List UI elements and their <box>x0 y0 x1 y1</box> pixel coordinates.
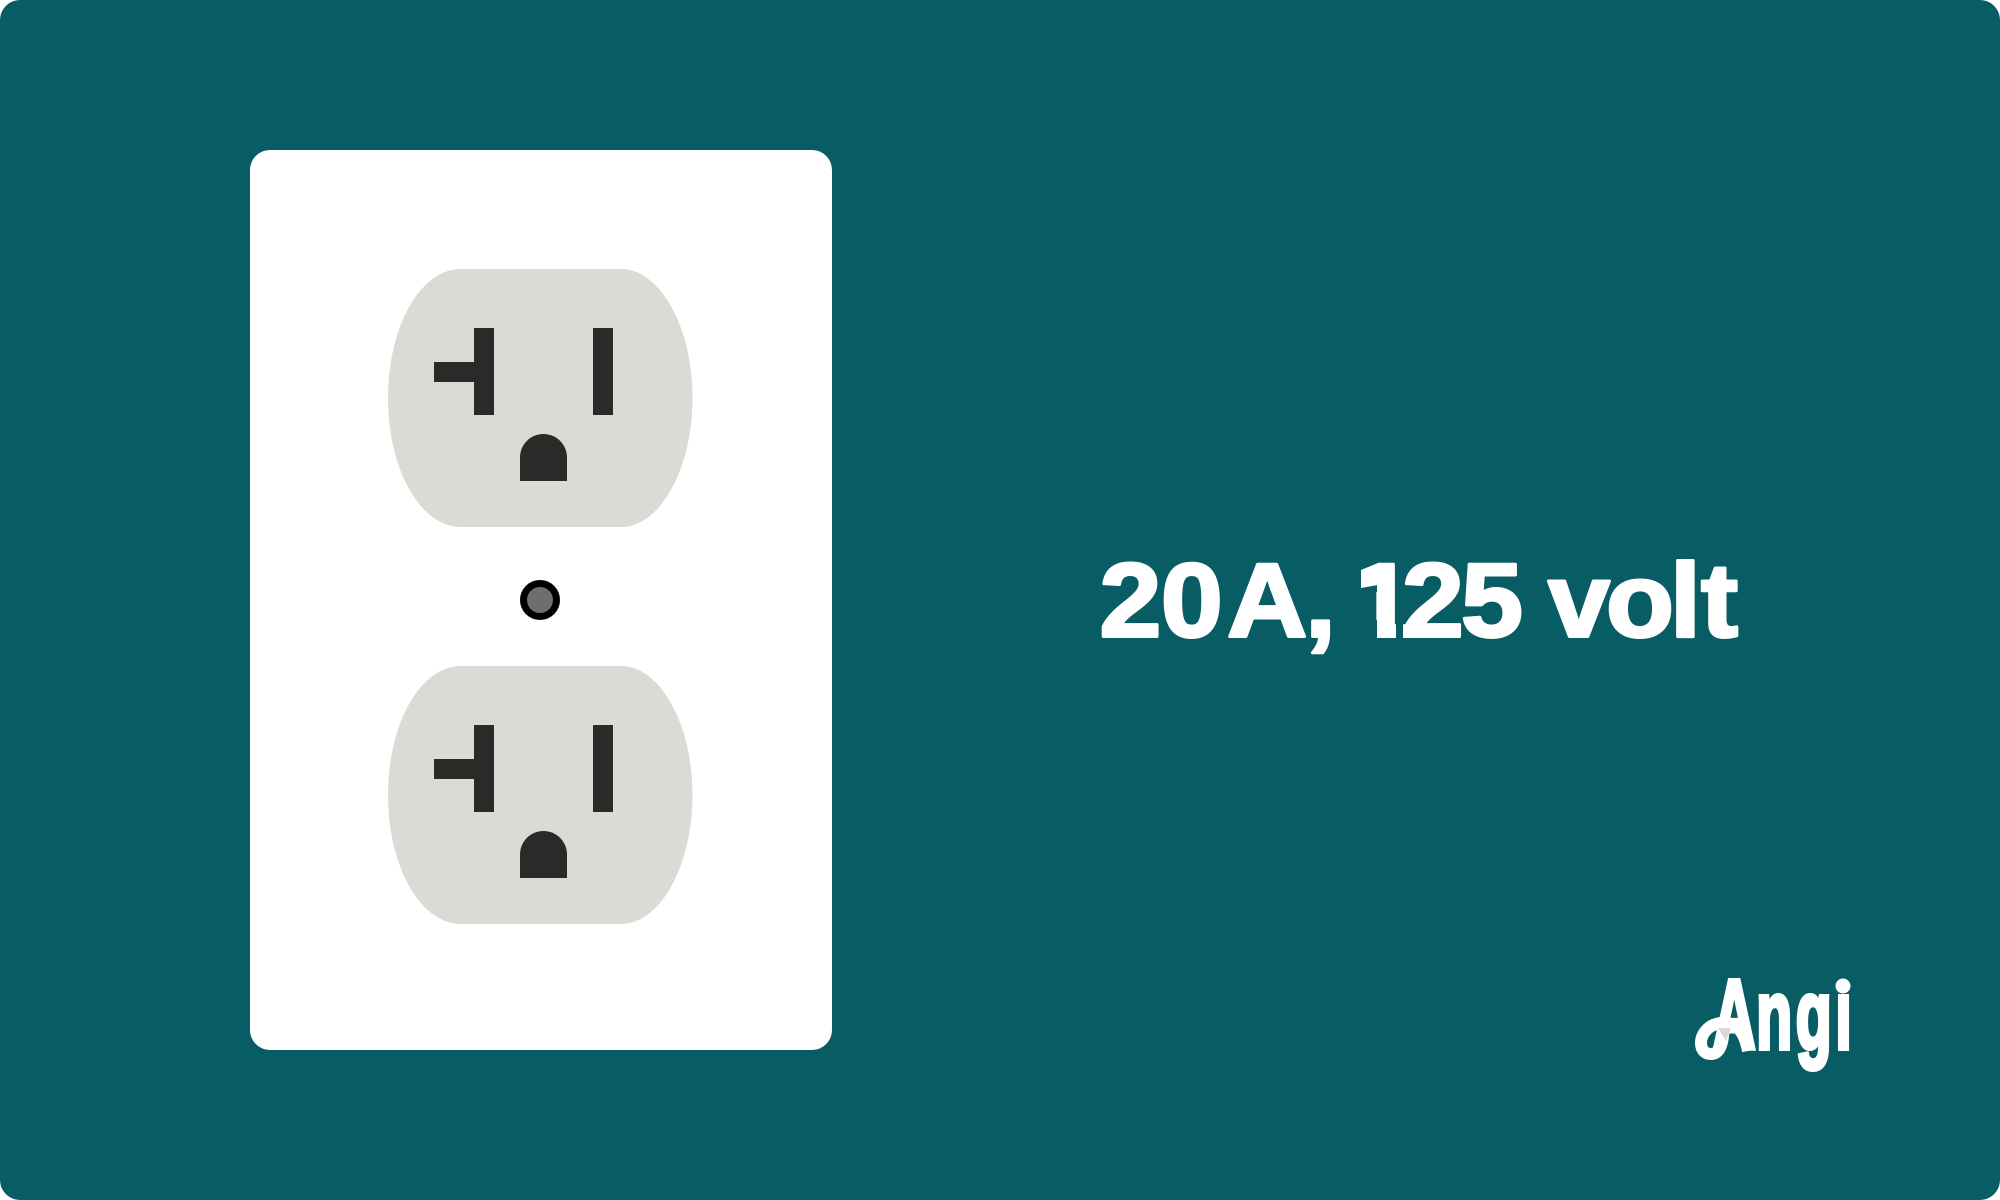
Angi logo <box>1701 961 1856 1070</box>
logo i dot cover <box>1832 970 1856 994</box>
receptacle face <box>388 269 692 527</box>
logo wordmark: Angi <box>1713 961 1852 1070</box>
numeral 1 flag <box>1361 563 1378 588</box>
rating text: 20A, 125 volt <box>1100 541 1738 659</box>
logo swirl shading <box>1718 1028 1731 1041</box>
mounting screw <box>524 584 556 616</box>
hot slot <box>593 328 613 415</box>
logo swirl <box>1701 1020 1748 1054</box>
bottom receptacle <box>388 666 692 924</box>
top receptacle <box>388 269 692 527</box>
ground hole <box>520 831 567 878</box>
hot slot <box>593 725 613 812</box>
ground hole <box>520 434 567 481</box>
T-shaped neutral slot <box>434 328 494 415</box>
outlet wall plate <box>250 150 832 1050</box>
receptacle face <box>388 666 692 924</box>
logo i dot <box>1836 978 1850 994</box>
plate body <box>250 150 832 1050</box>
heading: outlet rating <box>1100 541 1738 659</box>
T-shaped neutral slot <box>434 725 494 812</box>
